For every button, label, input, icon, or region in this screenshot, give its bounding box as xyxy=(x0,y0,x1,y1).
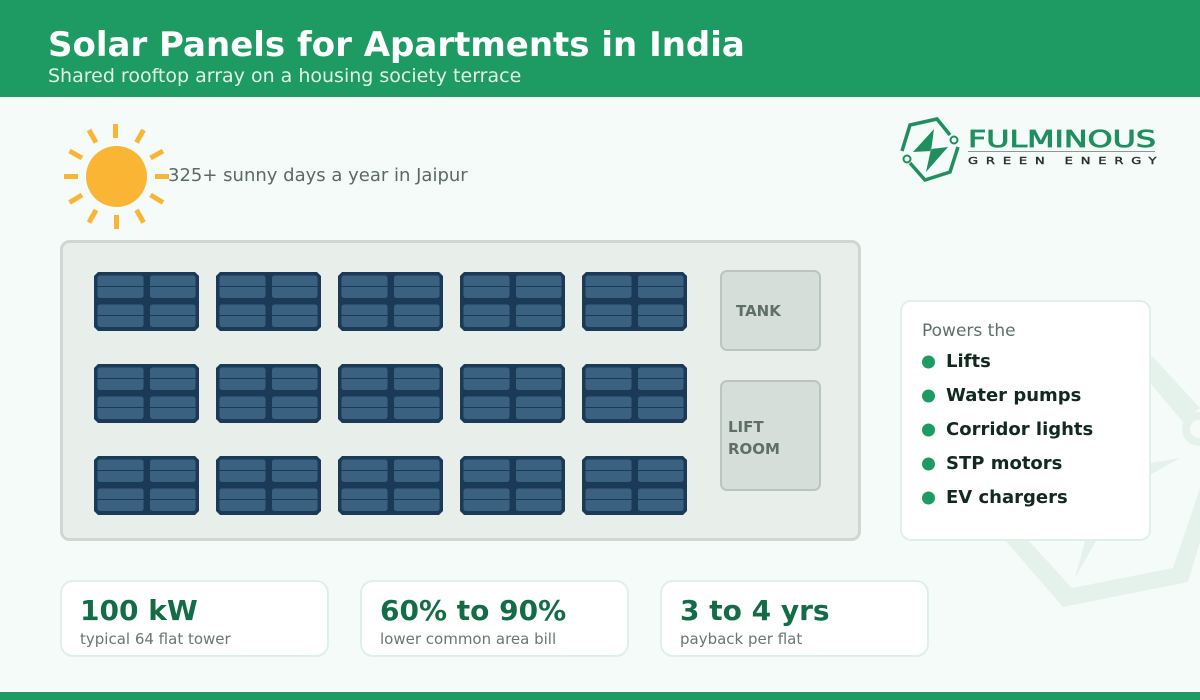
list item: water pumps: Water pumps xyxy=(946,385,1081,406)
panel: powers the: Powers the xyxy=(922,321,1016,341)
list item: ev chargers: EV chargers xyxy=(946,487,1068,508)
stat card: 3 to 4 yrs xyxy=(661,581,928,656)
footer band xyxy=(0,692,1200,700)
stat card: 60% to 90%: lower common area bill xyxy=(380,630,556,648)
lift room block: ROOM xyxy=(728,440,780,458)
logo: Fulminous Green Energy xyxy=(902,119,1158,180)
stat card: 100 kW: typical 64 flat tower xyxy=(80,630,232,648)
list item: lifts: Lifts xyxy=(946,351,991,372)
stat card: 3 to 4 yrs: payback per flat xyxy=(680,630,802,648)
subtitle: Shared rooftop array on a housing society terrace xyxy=(48,65,521,87)
header band xyxy=(0,0,1200,97)
tank block xyxy=(721,271,820,350)
sunny days caption: 325+ sunny days a year in Jaipur xyxy=(168,165,468,186)
stat card: 60% to 90%: 60% to 90% xyxy=(380,594,566,627)
icon: sun xyxy=(64,124,169,229)
logo rule xyxy=(968,151,1155,152)
title: Solar Panels for Apartments in India xyxy=(48,25,745,65)
watermark logo xyxy=(1005,357,1200,607)
panel: powers the xyxy=(901,301,1150,540)
stat card: 3 to 4 yrs: 3 to 4 yrs xyxy=(680,594,830,627)
list item: stp motors: STP motors xyxy=(946,453,1062,474)
logo wordmark: FULMINOUS xyxy=(968,127,1156,153)
lift room block: LIFT xyxy=(728,418,764,436)
list item: corridor lights: Corridor lights xyxy=(946,419,1093,440)
stat card: 100 kW xyxy=(61,581,328,656)
list item: lifts xyxy=(922,351,991,372)
stat card: 60% to 90% xyxy=(361,581,628,656)
solar array xyxy=(94,272,687,515)
stat card: 100 kW: 100 kW xyxy=(80,594,198,627)
panel: rooftop terrace xyxy=(62,242,860,540)
tank block: TANK xyxy=(736,302,782,320)
logo mark xyxy=(902,119,958,180)
logo tagline: GREEN ENERGY xyxy=(968,155,1158,167)
lift room block xyxy=(721,381,820,490)
